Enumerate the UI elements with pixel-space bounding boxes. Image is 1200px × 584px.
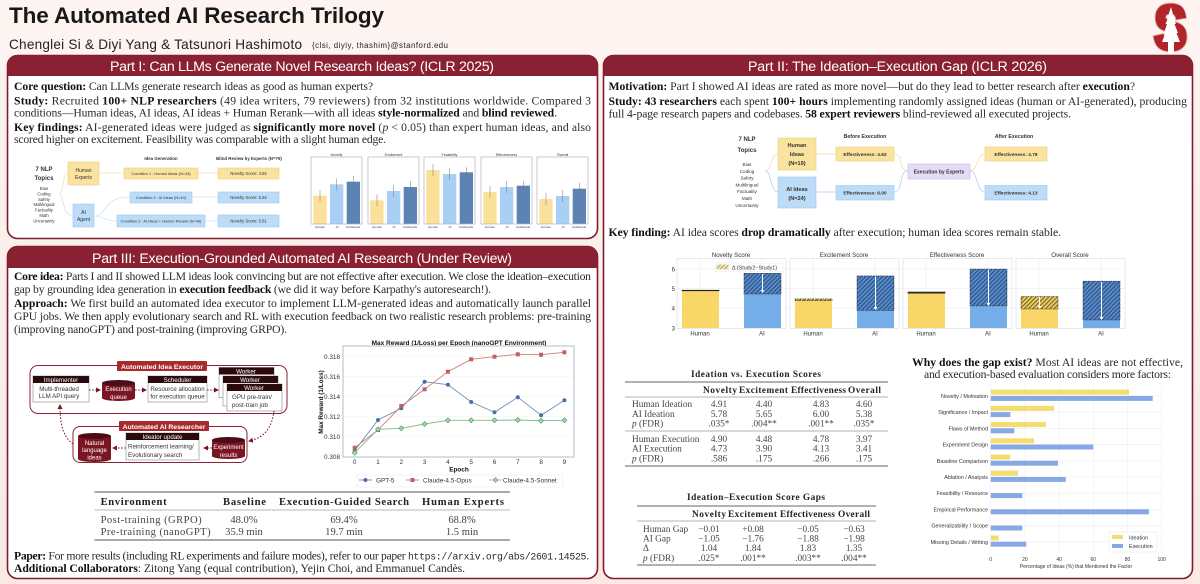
bar charts: five review scores: Human bbox=[428, 225, 438, 229]
bar charts: ideation vs execution scores: Excitement Score bbox=[820, 252, 869, 259]
flowchart: before and after execution: Topics bbox=[738, 148, 757, 154]
diagram: automated idea executor and researcher: Resource allocation bbox=[150, 386, 205, 393]
Part III text block: Approach: We first build an automated idea executor to implement LLM-generated ideas and automatically launch parallel bbox=[14, 297, 592, 310]
table: ideation-execution score gaps: −0.01 bbox=[698, 525, 720, 535]
bar charts: five review scores: AI+Rerank bbox=[572, 225, 587, 229]
table: ideation vs execution scores: .586 bbox=[711, 454, 727, 464]
bar charts: five review scores: Novelty bbox=[331, 153, 343, 157]
horizontal bar chart: factors mentioned: 100 bbox=[1158, 557, 1166, 563]
line chart: max reward per epoch: 0.310 bbox=[324, 434, 340, 441]
flowchart: before and after execution: Effectiveness: 4.78 bbox=[994, 152, 1038, 158]
horizontal bar chart: factors mentioned: Baseline Comparison bbox=[937, 459, 988, 465]
flowchart: idea generation: Factuality bbox=[35, 208, 54, 213]
table: ideation-execution score gaps: .025* bbox=[699, 554, 720, 564]
table: ideation vs execution scores: 4.90 bbox=[711, 435, 727, 445]
flowchart: before and after execution: Bias bbox=[743, 162, 752, 167]
flowchart: idea generation: Novelty Score: 4.84 bbox=[230, 171, 267, 176]
bar charts: ideation vs execution scores: Human bbox=[690, 332, 710, 338]
flowchart: idea generation: Uncertainty bbox=[33, 218, 55, 223]
horizontal bar chart: factors mentioned: Experiment Design bbox=[942, 443, 988, 449]
Part III heading bbox=[8, 246, 598, 268]
diagram: automated idea executor and researcher: queue bbox=[110, 395, 128, 401]
diagram: automated idea executor and researcher: Natural bbox=[85, 441, 104, 447]
horizontal bar chart: factors mentioned: Flaws of Method bbox=[948, 426, 988, 432]
line chart: max reward per epoch: Max Reward (1/Loss) bbox=[318, 370, 325, 434]
flowchart: idea generation: Condition 2 : AI Ideas (N=43) bbox=[136, 195, 187, 200]
table: ideation-execution score gaps: Excitement bbox=[728, 510, 778, 520]
line chart: max reward per epoch: 1 bbox=[376, 459, 380, 466]
flowchart: before and after execution: (N=24) bbox=[788, 196, 806, 202]
table: ideation vs execution scores: 3.90 bbox=[756, 444, 772, 454]
diagram: automated idea executor and researcher: Ideator update bbox=[143, 434, 183, 441]
Part III heading: Part III: Execution-Grounded Automated AI Research (Under Review) bbox=[92, 251, 512, 267]
results table bbox=[94, 492, 510, 540]
flowchart: before and after execution: Ideas bbox=[790, 152, 804, 158]
flowchart: before and after execution: After Execution bbox=[995, 134, 1033, 140]
flowchart: before and after execution: AI Ideas bbox=[786, 187, 808, 193]
table: ideation vs execution scores: Effectiveness bbox=[791, 386, 846, 396]
line chart: max reward per epoch: Claude-4.5-Sonnet bbox=[503, 478, 557, 484]
flowchart: before and after execution: 7 NLP bbox=[738, 137, 756, 143]
line chart: max reward per epoch: Epoch bbox=[449, 466, 469, 474]
line chart: max reward per epoch: 8 bbox=[539, 459, 543, 466]
Part I heading bbox=[8, 56, 598, 76]
diagram: automated idea executor and researcher: Reinforcement learning/ bbox=[128, 444, 194, 450]
diagram: automated idea executor and researcher: LLM API query bbox=[39, 393, 80, 400]
table: ideation-execution score gaps: .001** bbox=[740, 554, 766, 564]
results table: Post-training (GRPO) bbox=[101, 515, 202, 526]
Part I text block: Core question: Can LLMs generate research ideas as good as human experts? bbox=[14, 80, 373, 93]
results table: Baseline bbox=[223, 497, 266, 508]
table: ideation vs execution scores: 5.78 bbox=[711, 410, 727, 420]
results table: Environment bbox=[101, 497, 167, 508]
bar charts: ideation vs execution scores: AI bbox=[872, 332, 878, 338]
table: ideation vs execution scores: 4.40 bbox=[756, 400, 772, 410]
diagram: automated idea executor and researcher: Experiment bbox=[213, 445, 244, 451]
flowchart: before and after execution: Before Execution bbox=[844, 134, 886, 140]
table: ideation vs execution scores: .266 bbox=[813, 454, 829, 464]
line chart: max reward per epoch: 6 bbox=[493, 459, 497, 466]
Part II heading: Part II: The Ideation–Execution Gap (ICLR 2026) bbox=[748, 59, 1047, 75]
flowchart: idea generation: Blind Review by Experts (N=79) bbox=[216, 156, 282, 161]
diagram: automated idea executor and researcher: Automated AI Researcher bbox=[123, 424, 206, 431]
diagram: automated idea executor and researcher: Worker bbox=[236, 368, 256, 376]
diagram: automated idea executor and researcher: GPU pre-train/ bbox=[232, 394, 272, 401]
horizontal bar chart: factors mentioned: Ideation bbox=[1129, 536, 1148, 542]
table: ideation-execution score gaps: 1.35 bbox=[846, 544, 862, 554]
table: ideation vs execution scores: .035* bbox=[709, 420, 730, 430]
table: ideation-execution score gaps: −0.63 bbox=[843, 525, 865, 535]
table: ideation vs execution scores: 4.73 bbox=[711, 444, 727, 454]
Part I heading: Part I: Can LLMs Generate Novel Research Ideas? (ICLR 2025) bbox=[110, 59, 494, 75]
table: ideation vs execution scores: 4.60 bbox=[856, 400, 872, 410]
flowchart: before and after execution: Effectiveness: 4.83 bbox=[843, 152, 887, 158]
diagram: automated idea executor and researcher: Execution bbox=[105, 387, 132, 393]
line chart: max reward per epoch: 0.316 bbox=[324, 374, 340, 381]
horizontal bar chart: factors mentioned bbox=[931, 382, 1166, 570]
horizontal bar chart: factors mentioned: Execution bbox=[1129, 544, 1153, 550]
flowchart: before and after execution: Execution by Experts bbox=[914, 170, 965, 176]
horizontal bar chart: factors mentioned: Novelty / Motivation bbox=[941, 394, 988, 400]
Part III text block: Core idea: Parts I and II showed LLM ideas look convincing but are not effective after execution. We close the ideation–execution bbox=[14, 270, 591, 283]
table: ideation-execution score gaps bbox=[637, 493, 876, 565]
bar charts: ideation vs execution scores: AI bbox=[1098, 332, 1104, 338]
bar charts: five review scores: Human bbox=[372, 225, 382, 229]
panel: Part I bbox=[8, 56, 598, 238]
table: ideation vs execution scores: 4.83 bbox=[813, 400, 829, 410]
table: ideation vs execution scores: 4.48 bbox=[756, 435, 772, 445]
flowchart: before and after execution: Multilingual bbox=[736, 182, 758, 188]
bar charts: five review scores: Human bbox=[485, 225, 495, 229]
line chart: max reward per epoch: 3 bbox=[423, 459, 427, 466]
why the gap exists text bbox=[912, 356, 1183, 381]
table: ideation vs execution scores: 6.00 bbox=[813, 410, 829, 420]
Part I text block: Study: Recruited 100+ NLP researchers (49 idea writers, 79 reviewers) from 32 institutions worldwide. Compared 3 bbox=[14, 94, 591, 108]
flowchart: before and after execution: Effectiveness: 6.00 bbox=[843, 190, 887, 196]
flowchart: before and after execution: Factuality bbox=[737, 189, 758, 194]
bar charts: five review scores: Human bbox=[315, 225, 325, 229]
horizontal bar chart: factors mentioned: 40 bbox=[1056, 557, 1062, 563]
table: ideation-execution score gaps: +0.08 bbox=[742, 525, 764, 535]
Part III text block: gap by grounding idea generation in execution feedback (we did it way before Karpathy's autoresearch!). bbox=[14, 283, 491, 296]
line chart: max reward per epoch: 5 bbox=[469, 459, 473, 466]
table: ideation vs execution scores: Novelty bbox=[703, 386, 737, 396]
line chart: max reward per epoch bbox=[318, 340, 574, 487]
table: ideation-execution score gaps: Novelty bbox=[692, 510, 726, 520]
bar charts: five review scores: Excitement bbox=[385, 153, 402, 157]
table: ideation vs execution scores: 4.91 bbox=[711, 400, 727, 410]
diagram: automated idea executor and researcher: ideas bbox=[87, 456, 102, 462]
table: ideation vs execution scores: Human Ideation bbox=[632, 400, 693, 410]
bar charts: five review scores: AI+Rerank bbox=[516, 225, 531, 229]
table: ideation-execution score gaps: 1.04 bbox=[701, 544, 717, 554]
flowchart: idea generation bbox=[33, 156, 282, 227]
table: ideation vs execution scores: p (FDR) bbox=[631, 418, 663, 430]
diagram: automated idea executor and researcher: Worker bbox=[244, 385, 264, 392]
bar charts: five review scores bbox=[311, 153, 588, 229]
diagram: automated idea executor and researcher: Scheduler bbox=[164, 377, 191, 384]
diagram: automated idea executor and researcher: post-train job bbox=[232, 402, 268, 409]
flowchart: idea generation: Coding bbox=[37, 191, 51, 196]
horizontal bar chart: factors mentioned: 0 bbox=[989, 557, 992, 563]
horizontal bar chart: factors mentioned: Ablation / Analysis bbox=[944, 475, 988, 481]
paper link and collaborators bbox=[14, 550, 589, 575]
line chart: max reward per epoch: 2 bbox=[400, 459, 404, 466]
horizontal bar chart: factors mentioned: 60 bbox=[1091, 557, 1096, 563]
bar charts: ideation vs execution scores: AI bbox=[985, 332, 991, 338]
table: ideation vs execution scores: .175 bbox=[756, 454, 772, 464]
bar charts: ideation vs execution scores: Human bbox=[1029, 332, 1049, 338]
table: ideation vs execution scores: .035* bbox=[854, 420, 875, 430]
flowchart: before and after execution: Human bbox=[788, 143, 807, 149]
table: ideation vs execution scores: p (FDR) bbox=[631, 454, 663, 464]
table: ideation-execution score gaps: 1.83 bbox=[800, 544, 816, 554]
bar charts: five review scores: AI+Rerank bbox=[346, 225, 361, 229]
paper link and collaborators: Paper: For more results (including RL experiments and failure modes), refer to our paper https://arxiv.org/abs/2601.14525. bbox=[14, 550, 589, 562]
line chart: max reward per epoch: GPT-5 bbox=[376, 478, 395, 484]
results table: 68.8% bbox=[448, 515, 476, 526]
table: ideation vs execution scores: Human Execution bbox=[632, 435, 700, 445]
results table: 19.7 min bbox=[325, 527, 364, 538]
bar charts: ideation vs execution scores: Effectiveness Score bbox=[930, 252, 985, 259]
diagram: automated idea executor and researcher: Evolutionary search bbox=[128, 452, 183, 459]
horizontal bar chart: factors mentioned: Empirical Performance bbox=[933, 507, 988, 513]
flowchart: idea generation: Experts bbox=[75, 175, 92, 181]
line chart: max reward per epoch: Claude-4.5-Opus bbox=[423, 478, 472, 484]
flowchart: idea generation: Topics bbox=[35, 176, 54, 182]
table: ideation vs execution scores: AI Execution bbox=[632, 444, 682, 454]
bar charts: ideation vs execution scores: 4 bbox=[672, 306, 676, 312]
line chart: max reward per epoch: 4 bbox=[446, 459, 450, 466]
Part III text block bbox=[14, 270, 592, 336]
table: ideation vs execution scores: 3.97 bbox=[856, 435, 872, 445]
Part II heading bbox=[604, 56, 1192, 76]
Part II text block: Study: 43 researchers each spent 100+ hours implementing randomly assigned ideas (human or AI-generated), producing bbox=[608, 95, 1187, 108]
line chart: max reward per epoch: Max Reward (1/Loss) per Epoch (nanoGPT Environment) bbox=[372, 340, 546, 347]
table: ideation vs execution scores: 5.38 bbox=[856, 410, 872, 420]
bar charts: five review scores: AI bbox=[562, 225, 565, 229]
diagram: automated idea executor and researcher bbox=[30, 361, 287, 462]
line chart: max reward per epoch: 0.308 bbox=[324, 454, 340, 461]
table: ideation vs execution scores: .004** bbox=[751, 420, 777, 430]
table: ideation-execution score gaps: −1.88 bbox=[797, 534, 819, 544]
diagram: automated idea executor and researcher: for execution queue bbox=[150, 394, 205, 400]
bar charts: five review scores: AI bbox=[393, 225, 396, 229]
title: The Automated AI Research Trilogy bbox=[9, 3, 384, 28]
flowchart: before and after execution: Uncertainty bbox=[735, 203, 759, 208]
flowchart: before and after execution: Math bbox=[742, 196, 753, 201]
flowchart: before and after execution bbox=[735, 134, 1047, 208]
why the gap exists text: and execution-based evaluation considers more factors: bbox=[924, 368, 1171, 381]
key finding: Key finding: AI idea scores drop dramatically after execution; human idea scores remain stable. bbox=[608, 226, 1061, 239]
results table: 48.0% bbox=[230, 515, 258, 526]
diagram: automated idea executor and researcher: Worker bbox=[240, 377, 260, 384]
Part I text block: scored higher on excitement. Feasibility was comparable with a slight human edge. bbox=[14, 133, 386, 146]
results table: 69.4% bbox=[330, 515, 358, 526]
flowchart: idea generation: AI bbox=[81, 210, 86, 216]
table: ideation vs execution scores: 5.65 bbox=[756, 410, 772, 420]
bar charts: five review scores: Feasibility bbox=[442, 153, 458, 157]
bar charts: ideation vs execution scores bbox=[672, 252, 1125, 338]
Part II text block: full 4-page research papers and codebases. 58 expert reviewers blind-reviewed all executed projects. bbox=[608, 108, 1071, 120]
authors: {clsi, diyiy, thashim}@stanford.edu bbox=[312, 41, 448, 50]
bar charts: ideation vs execution scores: Novelty Score bbox=[712, 252, 751, 259]
flowchart: idea generation: Novelty Score: 5.64 bbox=[230, 195, 267, 200]
line chart: max reward per epoch: 0.314 bbox=[324, 394, 340, 401]
flowchart: idea generation: Idea Generation bbox=[144, 156, 178, 161]
line chart: max reward per epoch: 0.312 bbox=[324, 414, 340, 421]
table: ideation vs execution scores: Excitement bbox=[739, 386, 789, 396]
horizontal bar chart: factors mentioned: Feasibility / Resource bbox=[936, 491, 988, 497]
why the gap exists text: Why does the gap exist? Most AI ideas are not effective, bbox=[912, 356, 1183, 369]
table: ideation-execution score gaps: Effectiveness bbox=[780, 510, 835, 520]
table: ideation vs execution scores: 4.78 bbox=[813, 435, 829, 445]
flowchart: idea generation: Math bbox=[39, 213, 49, 218]
table: ideation vs execution scores: .001** bbox=[808, 420, 834, 430]
flowchart: idea generation: Agent bbox=[77, 217, 91, 223]
table: ideation-execution score gaps: .003** bbox=[795, 554, 821, 564]
flowchart: idea generation: Novelty Score: 5.81 bbox=[230, 218, 267, 224]
bar charts: five review scores: AI bbox=[449, 225, 452, 229]
Part I text block bbox=[14, 80, 591, 146]
bar charts: five review scores: AI bbox=[506, 225, 509, 229]
horizontal bar chart: factors mentioned: Significance / Impact bbox=[938, 410, 988, 416]
bar charts: five review scores: Human bbox=[541, 225, 551, 229]
table: ideation-execution score gaps: −1.05 bbox=[698, 534, 720, 544]
results table: Pre-training (nanoGPT) bbox=[101, 527, 211, 538]
flowchart: before and after execution: (N=19) bbox=[788, 161, 806, 167]
results table: 1.5 min bbox=[446, 527, 479, 538]
Part III text block: GPU jobs. We then apply evolutionary search and RL with execution feedback on two realistic research problems: pre-training bbox=[14, 310, 591, 323]
diagram: automated idea executor and researcher: language bbox=[82, 448, 108, 454]
horizontal bar chart: factors mentioned: 20 bbox=[1022, 557, 1028, 563]
table: ideation-execution score gaps: Δ bbox=[643, 544, 649, 554]
table: ideation vs execution scores: Ideation vs. Execution Scores bbox=[691, 370, 821, 380]
flowchart: before and after execution: Safety bbox=[740, 176, 754, 180]
table: ideation vs execution scores: .175 bbox=[856, 454, 872, 464]
Part II text block bbox=[608, 80, 1187, 120]
results table: Human Experts bbox=[422, 497, 504, 508]
Part I text block: Key findings: AI-generated ideas were judged as significantly more novel (p < 0.05) than expert human ideas, and also bbox=[14, 121, 591, 134]
bar charts: ideation vs execution scores: Overall Score bbox=[1051, 252, 1089, 259]
line chart: max reward per epoch: 7 bbox=[516, 459, 520, 466]
horizontal bar chart: factors mentioned: Percentage of Ideas (%) that Mentioned the Factor bbox=[1020, 564, 1132, 570]
bar charts: five review scores: AI+Rerank bbox=[459, 225, 474, 229]
paper link and collaborators: Additional Collaborators: Zitong Yang (equal contribution), Yejin Choi, and Emmanuel Candès. bbox=[14, 562, 465, 575]
bar charts: ideation vs execution scores: Human bbox=[916, 332, 936, 338]
table: ideation-execution score gaps: AI Gap bbox=[643, 534, 671, 544]
diagram: automated idea executor and researcher: results bbox=[220, 453, 237, 459]
results table: 35.9 min bbox=[225, 527, 264, 538]
bar charts: ideation vs execution scores: 3 bbox=[672, 326, 676, 332]
bar charts: ideation vs execution scores: AI bbox=[759, 332, 765, 338]
table: ideation-execution score gaps: Human Gap bbox=[643, 525, 689, 535]
table: ideation-execution score gaps: Ideation–Execution Score Gaps bbox=[687, 493, 825, 503]
bar charts: ideation vs execution scores: Human bbox=[803, 332, 823, 338]
diagram: automated idea executor and researcher: Implementer bbox=[44, 377, 78, 384]
diagram: automated idea executor and researcher: Automated Idea Executor bbox=[121, 364, 203, 371]
bar charts: ideation vs execution scores: 6 bbox=[672, 268, 676, 274]
table: ideation vs execution scores: AI Ideation bbox=[632, 410, 675, 420]
bar charts: five review scores: AI+Rerank bbox=[403, 225, 418, 229]
line chart: max reward per epoch: 0.318 bbox=[324, 354, 340, 361]
line chart: max reward per epoch: 0 bbox=[353, 459, 357, 466]
horizontal bar chart: factors mentioned: Missing Details / Writing bbox=[931, 540, 988, 546]
horizontal bar chart: factors mentioned: Generalizability / Scope bbox=[931, 524, 988, 530]
table: ideation vs execution scores: 4.13 bbox=[813, 444, 829, 454]
authors: Chenglei Si & Diyi Yang & Tatsunori Hashimoto bbox=[9, 37, 302, 52]
authors bbox=[9, 37, 448, 52]
flowchart: idea generation: Multilingual bbox=[34, 202, 55, 207]
flowchart: before and after execution: Effectiveness: 4.13 bbox=[994, 190, 1038, 196]
horizontal bar chart: factors mentioned: 80 bbox=[1125, 557, 1130, 563]
panel: Part III bbox=[8, 246, 598, 578]
diagram: automated idea executor and researcher: Multi-threaded bbox=[39, 386, 79, 393]
table: ideation vs execution scores: 3.41 bbox=[856, 444, 872, 454]
table: ideation-execution score gaps: .004** bbox=[841, 554, 867, 564]
table: ideation vs execution scores bbox=[625, 370, 888, 466]
flowchart: before and after execution: Coding bbox=[740, 169, 755, 174]
table: ideation-execution score gaps: Overall bbox=[838, 510, 870, 520]
bar charts: ideation vs execution scores: 5 bbox=[672, 287, 676, 293]
table: ideation-execution score gaps: p (FDR) bbox=[642, 553, 674, 564]
flowchart: idea generation: Human bbox=[75, 168, 92, 174]
flowchart: idea generation: Condition 3 : AI Ideas + Human Rerank (N=49) bbox=[121, 218, 202, 224]
flowchart: idea generation: Condition 1 : Human Ideas (N=43) bbox=[131, 171, 191, 176]
bar charts: five review scores: Overall bbox=[557, 153, 568, 157]
panel: Part II bbox=[604, 56, 1192, 578]
table: ideation-execution score gaps: −1.76 bbox=[742, 534, 764, 544]
bar charts: five review scores: AI bbox=[336, 225, 339, 229]
bar charts: five review scores: Effectiveness bbox=[496, 153, 517, 157]
bar charts: ideation vs execution scores: Δ (Study2−Study1) bbox=[732, 266, 777, 272]
table: ideation-execution score gaps: −0.05 bbox=[797, 525, 819, 535]
table: ideation vs execution scores: Overall bbox=[848, 386, 881, 396]
Part II text block: Motivation: Part I showed AI ideas are rated as more novel—but do they lead to better research after execution? bbox=[608, 80, 1135, 93]
flowchart: idea generation: Bias bbox=[40, 186, 48, 191]
Part III text block: (improving nanoGPT) and post-training (improving GRPO). bbox=[14, 323, 287, 336]
flowchart: idea generation: 7 NLP bbox=[35, 167, 53, 173]
Part I text block: conditions—Human ideas, AI ideas, AI ideas + Human Rerank—with all ideas style-normalized and blind reviewed. bbox=[14, 106, 557, 120]
flowchart: idea generation: Safety bbox=[38, 197, 51, 202]
table: ideation-execution score gaps: 1.84 bbox=[745, 544, 761, 554]
results table: Execution-Guided Search bbox=[279, 497, 409, 508]
table: ideation-execution score gaps: −1.98 bbox=[843, 534, 865, 544]
line chart: max reward per epoch: 9 bbox=[563, 459, 567, 466]
